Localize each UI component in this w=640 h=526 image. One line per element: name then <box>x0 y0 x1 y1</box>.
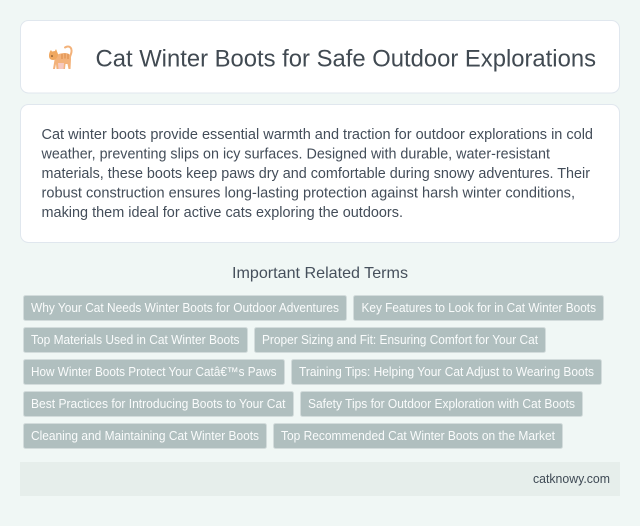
tag <box>24 296 346 320</box>
panel: description <box>20 104 620 242</box>
tag: Training Tips: Helping Your Cat Adjust to Wearing Boots <box>299 365 594 379</box>
title: Cat Winter Boots for Safe Outdoor Explorations <box>96 46 596 72</box>
tag <box>24 424 266 448</box>
tag: Safety Tips for Outdoor Exploration with Cat Boots <box>308 397 575 411</box>
text block: description: Cat winter boots provide essential warmth and traction for outdoor explorations in cold <box>42 127 593 143</box>
tag: Top Materials Used in Cat Winter Boots <box>31 333 240 347</box>
icon: cat <box>49 46 72 69</box>
text block: description: making them ideal for active cats exploring the outdoors. <box>42 205 403 221</box>
tag <box>24 392 294 416</box>
tag: Cleaning and Maintaining Cat Winter Boots <box>31 429 259 443</box>
tag <box>354 296 604 320</box>
tag: Best Practices for Introducing Boots to Your Cat <box>31 397 286 411</box>
tag <box>292 360 602 384</box>
footer <box>20 462 620 496</box>
tag <box>254 328 546 352</box>
text block: description: weather, preventing slips on icy surfaces. Designed with durable, water-resistant <box>41 146 550 162</box>
footer source text: catknowy.com <box>533 472 610 486</box>
tag: Proper Sizing and Fit: Ensuring Comfort for Your Cat <box>262 333 538 347</box>
text block: description: materials, these boots keep paws dry and comfortable during snowy adventures. Their <box>42 166 590 182</box>
tag list <box>24 296 604 448</box>
panel: header <box>20 20 620 93</box>
text block: description: robust construction ensures long-lasting protection against harsh winter conditions, <box>42 186 575 202</box>
tag: Top Recommended Cat Winter Boots on the Market <box>281 429 555 443</box>
tag <box>24 360 284 384</box>
tag <box>300 392 582 416</box>
tag: How Winter Boots Protect Your Catâ€™s Paws <box>31 365 276 379</box>
tag <box>24 328 248 352</box>
tag <box>274 424 562 448</box>
text block: description <box>41 127 593 221</box>
tag: Why Your Cat Needs Winter Boots for Outdoor Adventures <box>31 301 339 315</box>
heading: related terms: Important Related Terms <box>232 265 408 282</box>
tag: Key Features to Look for in Cat Winter Boots <box>362 301 596 315</box>
